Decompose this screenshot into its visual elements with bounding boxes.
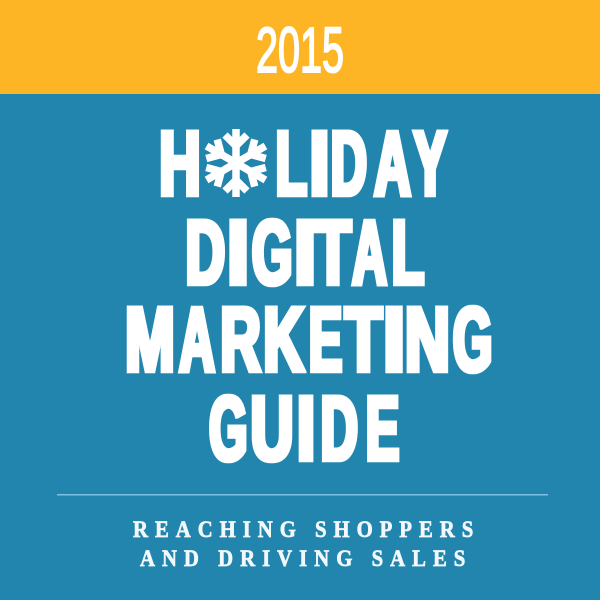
title line: holiday: D xyxy=(331,113,367,215)
title line: marketing: E xyxy=(309,289,342,391)
title line: digital: I xyxy=(294,202,316,304)
title line: digital: L xyxy=(392,202,424,304)
title line: holiday: A xyxy=(374,113,411,215)
title line: marketing: T xyxy=(345,289,382,391)
title line: digital: T xyxy=(315,202,351,304)
title line: holiday: H xyxy=(159,113,200,215)
title line: marketing: N xyxy=(405,289,450,391)
title line: holiday: L xyxy=(276,113,307,215)
title line: digital: A xyxy=(352,202,387,304)
title xyxy=(125,113,492,480)
title line: guide: G xyxy=(209,378,247,480)
title line: marketing: M xyxy=(125,289,175,391)
title line: digital: D xyxy=(186,202,225,304)
title line: guide: E xyxy=(366,378,399,480)
year text: 2015 xyxy=(256,14,344,86)
year banner xyxy=(0,0,600,94)
title line: marketing: R xyxy=(220,289,261,391)
icon: snowflake xyxy=(201,129,271,197)
title line: guide xyxy=(209,378,399,480)
title line: guide: U xyxy=(251,378,293,480)
title line: guide: I xyxy=(297,378,315,480)
title line: digital xyxy=(186,202,424,304)
title line: guide: D xyxy=(321,378,358,480)
title line: digital: G xyxy=(252,202,292,304)
title line: holiday: Y xyxy=(414,113,447,215)
title line: marketing: G xyxy=(453,289,492,391)
title line: digital: I xyxy=(227,202,249,304)
subtitle xyxy=(133,517,473,571)
title line: marketing xyxy=(125,289,492,391)
subtitle line 1: REACHING SHOPPERS xyxy=(133,517,473,542)
subtitle line 2: AND DRIVING SALES xyxy=(140,546,465,571)
divider line xyxy=(57,494,548,496)
title line: marketing: A xyxy=(179,289,215,391)
title line: marketing: I xyxy=(383,289,405,391)
title line: holiday: I xyxy=(309,113,330,215)
title line: marketing: K xyxy=(264,289,304,391)
title line: holiday xyxy=(159,113,447,215)
